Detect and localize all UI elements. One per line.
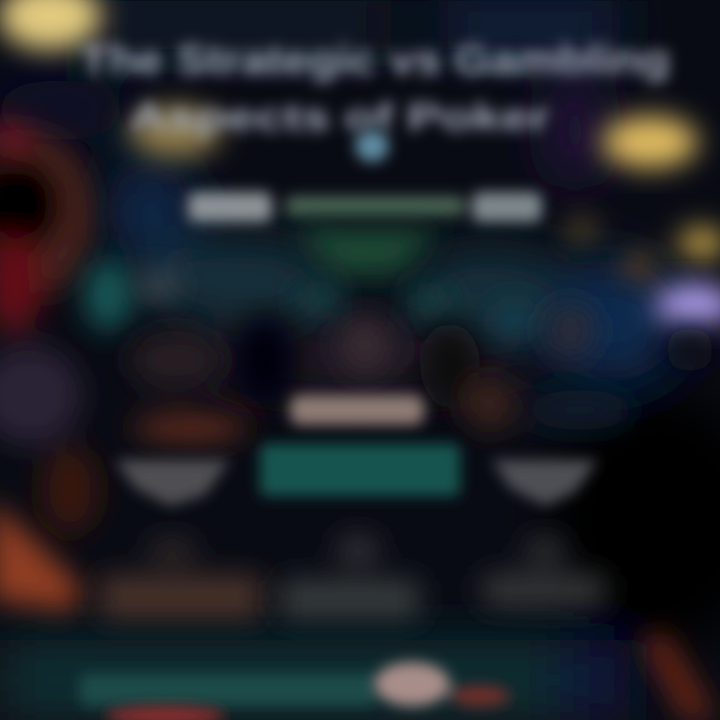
footer chips <box>105 662 510 720</box>
foreground arm: right <box>640 632 712 720</box>
arm: left <box>0 500 85 612</box>
title: Aspects of Poker <box>130 97 550 139</box>
subtitle <box>188 192 542 222</box>
centre heading bar <box>290 395 424 425</box>
lamp: left centre <box>129 106 221 158</box>
crowd figures <box>129 304 714 442</box>
lamps: far right <box>564 216 720 279</box>
column text: left <box>98 538 263 619</box>
panel label: right <box>492 460 598 506</box>
title: The Strategic vs Gambling <box>80 36 670 83</box>
lamp: top left <box>0 0 102 50</box>
panel label: left <box>115 460 230 506</box>
title <box>80 36 670 139</box>
seated person: left <box>0 121 100 535</box>
teal crowd highlights <box>84 259 541 338</box>
footer bar <box>80 674 375 706</box>
panel: centre teal card <box>260 444 460 496</box>
column text: right <box>482 536 606 606</box>
green table top <box>295 228 440 275</box>
column text: centre <box>280 536 420 618</box>
blue accent spot <box>355 130 389 162</box>
screen glow: right <box>655 283 720 327</box>
lamp: right <box>602 116 698 168</box>
